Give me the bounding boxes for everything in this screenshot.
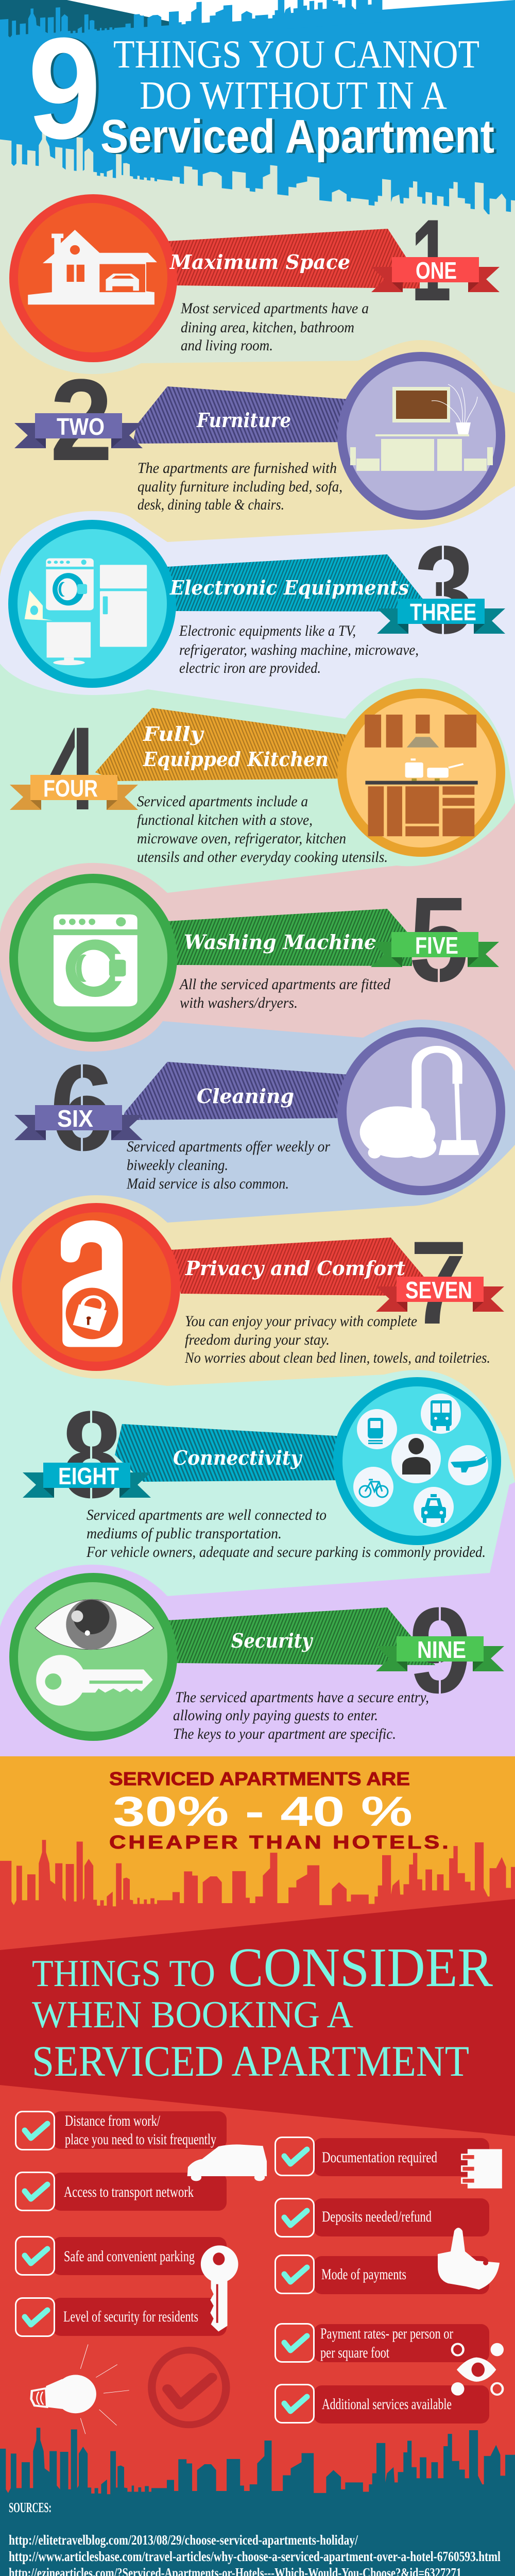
check item: distance: Distance from work/ — [65, 2112, 160, 2129]
body text: biweekly cleaning. — [127, 1157, 228, 1174]
heading: Fully — [143, 722, 204, 745]
panel: checklist left — [15, 2111, 227, 2336]
panel: item 6 cleaning — [14, 1027, 505, 1195]
number 5: 5 — [409, 872, 469, 1007]
heading: Washing Machine — [184, 930, 376, 954]
icon: thumbs up — [438, 2228, 500, 2290]
panel: item 8 connectivity — [23, 1377, 501, 1561]
body text: Maid service is also common. — [126, 1175, 289, 1192]
background: section 4 mint — [0, 664, 515, 1756]
icon: vacuum cleaner — [337, 1027, 505, 1195]
icon: key — [201, 2245, 238, 2331]
body text: Serviced apartments offer weekly or — [127, 1138, 330, 1155]
heading: things to consider: CONSIDER — [228, 1937, 493, 1998]
ribbon ONE: ONE — [416, 257, 457, 284]
banner — [167, 229, 420, 289]
ribbon EIGHT — [23, 1463, 151, 1498]
background: dark red heading band — [0, 1899, 515, 2136]
check item: rates: per square foot — [320, 2344, 389, 2361]
panel: item 3 electronic equipments — [8, 520, 505, 688]
skyline: blue header top — [0, 0, 382, 49]
heading: Furniture — [196, 409, 291, 432]
sources list — [9, 2532, 501, 2576]
icon: big check circle — [152, 2350, 226, 2425]
panel: footer — [0, 2428, 515, 2576]
panel: item 4 fully equipped kitchen — [10, 689, 505, 866]
ribbon NINE — [376, 1636, 504, 1671]
panel: checklist right — [275, 2137, 489, 2424]
ribbon SEVEN: SEVEN — [405, 1277, 472, 1303]
heading: Privacy and Comfort — [185, 1257, 405, 1280]
body text: Most serviced apartments have a — [180, 300, 369, 317]
body text: utensils and other everyday cooking utensils. — [137, 849, 388, 866]
panel: item 1 maximum space — [9, 194, 500, 362]
background: section 8 mint — [0, 1301, 515, 1756]
icon: eye and key — [9, 1573, 177, 1741]
skyline: red — [0, 1840, 515, 1932]
body text: mediums of public transportation. — [87, 1525, 282, 1542]
background: orange band — [0, 1756, 515, 1962]
heading: Cleaning — [197, 1084, 294, 1108]
body text: Serviced apartments are well connected to — [87, 1506, 327, 1523]
check item: deposits — [275, 2198, 489, 2237]
background: blue header body — [0, 0, 515, 242]
check item: parking: Safe and convenient parking — [64, 2248, 195, 2265]
background: section 5 pink — [0, 803, 515, 1756]
big number nine: 9 — [28, 8, 101, 169]
heading: Security — [231, 1629, 314, 1652]
body text — [138, 460, 342, 513]
banner — [170, 1238, 424, 1296]
banner — [123, 1062, 350, 1120]
ribbon FIVE: FIVE — [415, 932, 458, 959]
heading: Equipped Kitchen — [143, 748, 329, 771]
panel: item 7 privacy and comfort — [12, 1203, 504, 1371]
icon: eye with circles — [451, 2343, 504, 2396]
ribbon FOUR — [10, 775, 138, 810]
banner — [133, 386, 350, 444]
check item: deposits: Deposits needed/refund — [322, 2208, 432, 2225]
body text: electric iron are provided. — [179, 659, 321, 676]
ribbon SEVEN — [376, 1277, 504, 1312]
number 8: 8 — [62, 1385, 122, 1523]
check item: distance: place you need to visit frequently — [65, 2131, 216, 2148]
background: white page top — [0, 0, 515, 361]
check item: security: Level of security for residents — [63, 2308, 198, 2325]
callout line 1: SERVICED APARTMENTS ARE — [109, 1768, 410, 1789]
body text: refrigerator, washing machine, microwave, — [179, 641, 419, 658]
ribbon ONE — [371, 257, 500, 292]
icon: washing machine — [9, 874, 177, 1042]
icon: transport network — [333, 1377, 501, 1545]
background: section 7 cream — [0, 1145, 515, 1756]
icon: kitchen — [337, 689, 505, 857]
body text: You can enjoy your privacy with complete — [185, 1313, 417, 1330]
number 6: 6 — [49, 1039, 114, 1176]
body text — [184, 1313, 490, 1366]
heading: things to consider: WHEN BOOKING A — [32, 1994, 353, 2036]
banner — [95, 708, 350, 781]
body text: desk, dining table & chairs. — [138, 496, 284, 513]
body text — [86, 1506, 486, 1561]
title line 2: DO WITHOUT IN A — [140, 73, 447, 117]
icon: house — [9, 194, 177, 362]
banner — [115, 1424, 345, 1482]
check item: documentation — [275, 2137, 489, 2176]
ribbon TWO: TWO — [57, 413, 105, 440]
icon: furniture — [337, 352, 505, 520]
body text: freedom during your stay. — [185, 1331, 330, 1348]
ribbon THREE — [377, 599, 505, 634]
heading: Electronic Equipments — [169, 576, 409, 599]
ribbon SIX: SIX — [57, 1105, 93, 1132]
number 7: 7 — [410, 1216, 468, 1349]
body text: Electronic equipments like a TV, — [179, 622, 356, 639]
panel: item 2 furniture — [14, 352, 505, 520]
number 4: 4 — [46, 702, 97, 835]
ribbon TWO — [14, 413, 143, 448]
body text: microwave oven, refrigerator, kitchen — [137, 830, 346, 847]
body text: allowing only paying guests to enter. — [173, 1707, 378, 1724]
background: section 9 lilac — [0, 1482, 515, 1756]
icon: light bulb — [31, 2345, 129, 2434]
sources heading: SOURCES: — [9, 2500, 52, 2515]
body text: The keys to your apartment are specific. — [173, 1725, 396, 1742]
body text: The serviced apartments have a secure entry, — [175, 1689, 429, 1706]
number 9: 9 — [409, 1582, 472, 1719]
icon: notebook — [461, 2149, 502, 2189]
background: section 3 lavender — [0, 486, 515, 1756]
panel: price callout orange band — [0, 1756, 515, 1962]
check item: security — [15, 2298, 227, 2336]
panel: item 5 washing machine — [9, 872, 499, 1042]
body text: All the serviced apartments are fitted — [179, 976, 391, 993]
check item: additional — [275, 2384, 489, 2424]
body text — [173, 1689, 429, 1742]
body text: Serviced apartments include a — [137, 793, 308, 810]
callout percentage: 30% - 40 % — [113, 1788, 413, 1835]
heading: things to consider — [32, 1937, 493, 2086]
banner — [167, 554, 424, 612]
heading: things to consider: THINGS TO — [32, 1953, 215, 1995]
check item: rates — [275, 2324, 489, 2362]
check item: rates: Payment rates- per person or — [320, 2325, 453, 2342]
callout line 3: CHEAPER THAN HOTELS. — [109, 1832, 449, 1853]
ribbon SIX — [14, 1105, 143, 1140]
number 1: 1 — [411, 195, 451, 325]
icon: door hanger — [12, 1203, 180, 1371]
ribbon FOUR: FOUR — [43, 775, 98, 802]
panel: item 9 security — [9, 1573, 504, 1742]
ribbon EIGHT: EIGHT — [58, 1463, 119, 1489]
background: teal footer — [0, 2499, 515, 2576]
body text — [137, 793, 388, 866]
check item: payments — [275, 2256, 489, 2294]
skyline: teal — [0, 2428, 515, 2520]
body text: quality furniture including bed, sofa, — [138, 478, 342, 495]
body text — [179, 976, 391, 1011]
check item: distance — [15, 2111, 227, 2149]
background: section 2 cream — [0, 319, 515, 1756]
check item: parking — [15, 2237, 227, 2275]
ribbon NINE: NINE — [417, 1636, 466, 1663]
check item: transport — [15, 2172, 227, 2211]
banner — [167, 1607, 435, 1665]
check item: transport: Access to transport network — [64, 2183, 194, 2200]
body text: functional kitchen with a stove, — [137, 811, 313, 828]
body text: with washers/dryers. — [180, 994, 298, 1011]
ribbon THREE: THREE — [410, 599, 476, 625]
icon: appliances — [8, 520, 176, 688]
background: section 1 pale green — [0, 175, 515, 464]
check item: documentation: Documentation required — [322, 2149, 437, 2166]
body text — [179, 622, 419, 676]
heading — [143, 722, 329, 771]
number 2: 2 — [50, 355, 113, 485]
body text — [126, 1138, 330, 1192]
body text: and living room. — [181, 337, 273, 354]
icon: van — [187, 2144, 267, 2181]
body text: dining area, kitchen, bathroom — [181, 319, 354, 336]
background: dark teal top corner — [0, 0, 178, 46]
background: red section — [0, 1929, 515, 2501]
banner — [167, 909, 412, 966]
title block — [28, 8, 494, 169]
body text — [180, 300, 369, 354]
skyline: pale green — [0, 128, 515, 239]
check item: payments: Mode of payments — [321, 2266, 406, 2283]
background: section 6 blue grey — [0, 968, 515, 1756]
check item: additional: Additional services available — [322, 2396, 452, 2413]
heading: Connectivity — [173, 1446, 303, 1469]
body text: The apartments are furnished with — [138, 460, 337, 477]
heading: things to consider: SERVICED APARTMENT — [32, 2037, 469, 2086]
number 3: 3 — [415, 520, 474, 659]
ribbon FIVE — [371, 932, 499, 967]
heading: Maximum Space — [169, 250, 350, 274]
sources list: http://elitetravelblog.com/2013/08/29/choose-serviced-apartments-holiday/ — [9, 2532, 358, 2548]
